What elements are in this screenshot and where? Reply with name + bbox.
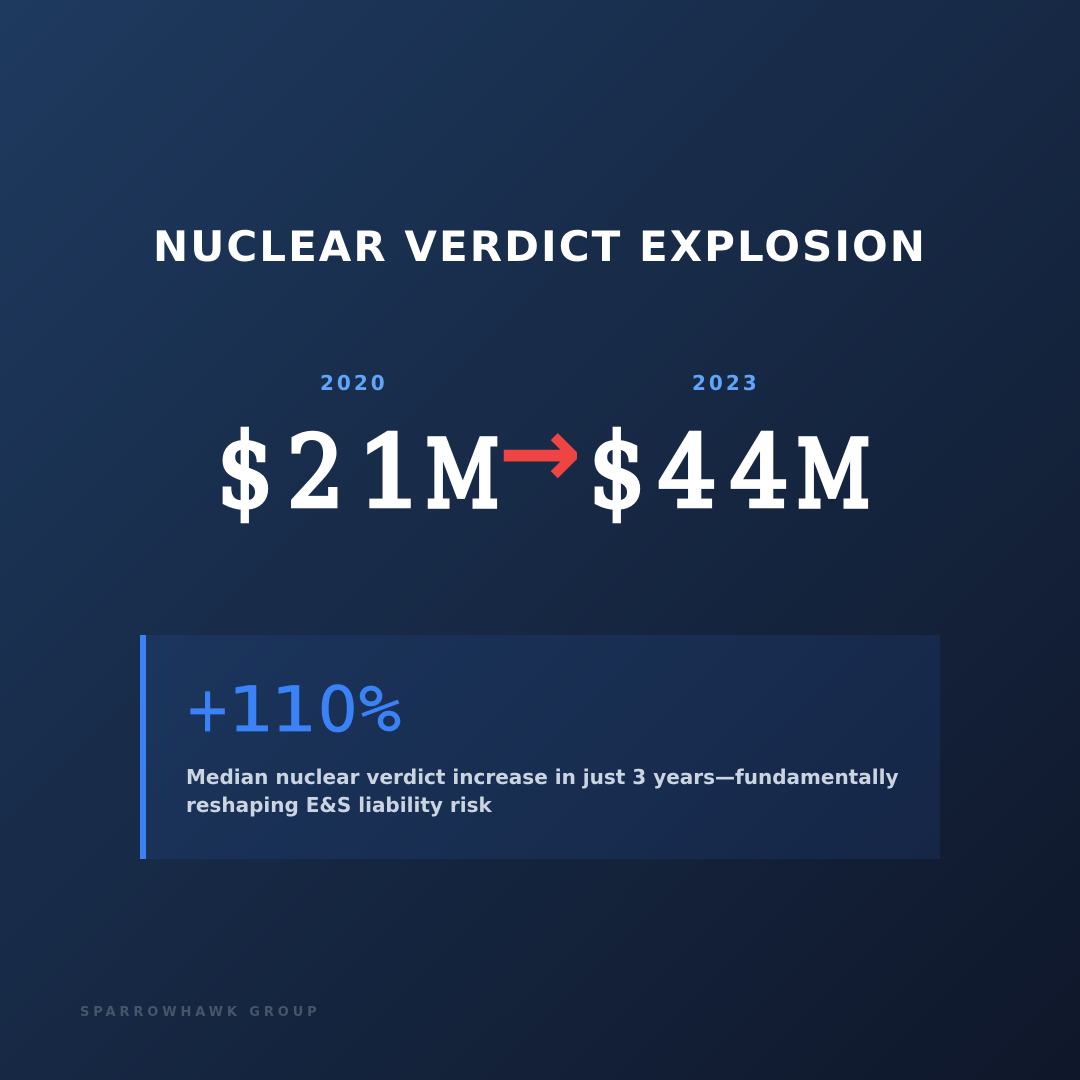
value: 2020: 1	[357, 416, 423, 530]
footer brand: SPARROWHAWK GROUP	[80, 1005, 321, 1020]
value: 2023: 4	[730, 416, 789, 530]
value: 2020: 2	[287, 416, 344, 530]
stat: +110%	[185, 671, 401, 746]
value: 2020: $	[217, 412, 274, 530]
stat: +110%: 1	[228, 672, 274, 746]
description	[186, 765, 898, 817]
stat: +110%: +	[185, 672, 230, 746]
description: reshaping E&S liability risk	[186, 793, 492, 817]
stat: +110%: %	[359, 671, 401, 746]
arrow: →	[498, 394, 582, 511]
year label: 2023: 2023	[692, 371, 760, 395]
accent bar	[140, 635, 146, 859]
value: 2023	[589, 412, 870, 530]
value: 2023: M	[797, 421, 870, 528]
value: 2023: $	[589, 412, 646, 530]
panel: callout	[140, 635, 940, 859]
title: NUCLEAR VERDICT EXPLOSION	[153, 222, 927, 271]
description: Median nuclear verdict increase in just 3 years—fundamentally	[186, 765, 898, 789]
value: 2023: 4	[658, 416, 717, 530]
stat: +110%: 0	[318, 672, 357, 746]
value: 2020	[217, 412, 499, 530]
stat: +110%: 1	[271, 672, 317, 746]
value: 2020: M	[426, 421, 499, 528]
year label: 2020: 2020	[320, 371, 388, 395]
